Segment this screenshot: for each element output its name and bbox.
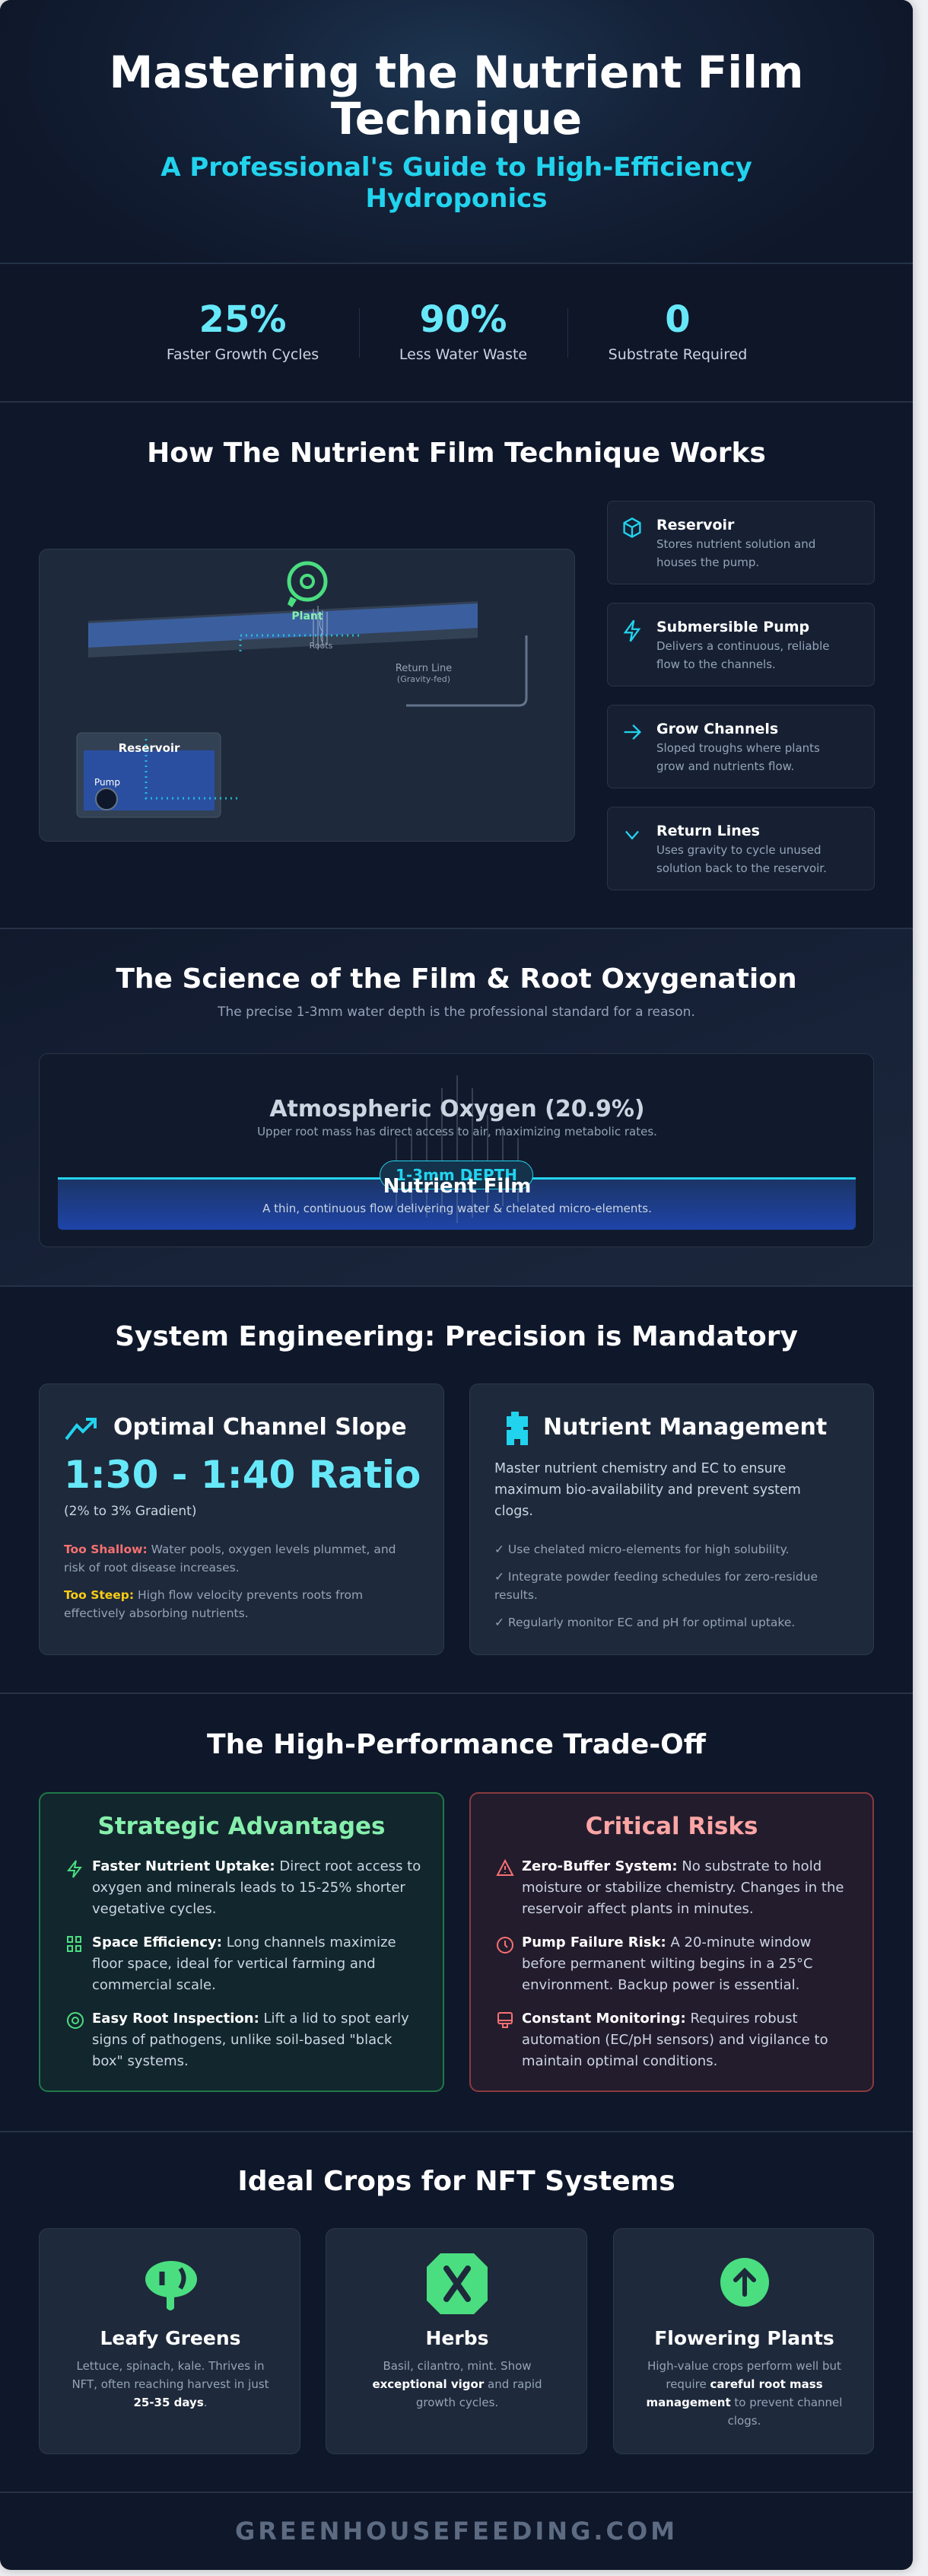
stat: 0: Substrate Required [609,346,747,363]
icon: plant [288,563,326,623]
reservoir: Pump [94,777,120,788]
section heading: trade-off: The High-Performance Trade-Off [207,1729,706,1760]
card: nutrient management [469,1384,874,1655]
icon: puzzle [507,1412,528,1445]
card: channel slope: Optimal Channel Slope [113,1414,407,1441]
panel: risks [469,1792,874,2092]
card: channel slope: (2% to 3% Gradient) [64,1504,196,1519]
crop card: leafy greens [39,2228,300,2454]
heading: The Science of the Film & Root Oxygenation [116,963,797,995]
return line: (Gravity-fed) [397,674,450,684]
risk: monitoring: Constant Monitoring: Requires robust automation (EC/pH sensors) and vigilance to maintain optimal conditions. [522,2011,828,2069]
advantage: inspection: Easy Root Inspection: Lift a lid to spot early signs of pathogens, unlike soil-based "black box" systems. [92,2011,409,2069]
step card: reservoir [607,501,875,584]
stat: 90%: Less Water Waste [399,346,527,363]
step card: pump: Delivers a continuous, reliable flow to the channels. [656,639,829,671]
subtitle [160,152,752,214]
icon: leaf [145,2261,197,2310]
film diagram [39,1053,874,1247]
nutrient film band [58,1177,856,1230]
section heading: how it works: How The Nutrient Film Technique Works [147,438,766,469]
crop card: leafy greens: Leafy Greens [100,2327,241,2349]
step card: return lines: Uses gravity to cycle unused solution back to the reservoir. [656,843,827,875]
science section [0,929,913,1285]
checklist: ✓ Integrate powder feeding schedules for zero-residue results. [494,1570,818,1602]
stat: 0 [609,298,747,363]
return line: Return Line [396,663,452,674]
crop card: flowering [613,2228,874,2454]
stat: 25%: Faster Growth Cycles [167,346,319,363]
icon: trending [65,1418,97,1440]
step card: pump: Submersible Pump [656,619,809,635]
return line [396,635,526,705]
advantage: space: Space Efficiency: Long channels maximize floor space, ideal for vertical farming and commercial scale. [92,1934,396,1993]
footer: GREENHOUSEFEEDING.COM [235,2517,678,2546]
subheading: The precise 1-3mm water depth is the professional standard for a reason. [218,1005,695,1020]
too shallow: Too Shallow: Water pools, oxygen levels plummet, and risk of root disease increases. [64,1543,396,1575]
panel: advantages: Strategic Advantages [98,1813,385,1840]
checklist [494,1543,818,1629]
stat: 25%: 25% [199,298,286,341]
title: Technique [331,93,582,145]
reservoir: Reservoir [119,741,180,755]
root lines [396,1075,519,1223]
risk: pump failure: Pump Failure Risk: A 20-minute window before permanent wilting begins in a 25°C environment. Backup power is essential. [522,1934,813,1993]
icon: plant: Plant [291,610,323,623]
crop card: flowering: Flowering Plants [654,2327,834,2349]
checklist: ✓ Regularly monitor EC and pH for optimal uptake. [494,1616,795,1629]
depth pill: 1-3mm DEPTH [396,1166,517,1184]
film diagram: A thin, continuous flow delivering water & chelated micro-elements. [262,1202,652,1215]
subtitle: Hydroponics [365,183,548,214]
stat: 90% [399,298,527,363]
icon: flowering [720,2258,769,2307]
section heading: engineering: System Engineering: Precision is Mandatory [115,1321,798,1352]
stats row [0,264,913,402]
diagram panel: Roots [310,641,333,651]
risk: zero buffer: Zero-Buffer System: No substrate to hold moisture or stabilize chemistry. Changes in the reservoir affect plants in minutes. [522,1858,844,1917]
crop card: flowering: High-value crops perform well but require careful root mass management to prevent channel clogs. [647,2359,842,2428]
step card: return lines [607,807,875,890]
description: Master nutrient chemistry and EC to ensure maximum bio-availability and prevent system clogs. [494,1461,801,1519]
step card: channels: Sloped troughs where plants grow and nutrients flow. [656,741,820,773]
step card: reservoir: Reservoir [656,517,734,533]
nutrient film label: Nutrient Film [383,1175,531,1198]
roots [313,606,327,650]
panel: risks: Critical Risks [586,1813,758,1840]
oxygen label: Atmospheric Oxygen (20.9%) [269,1096,645,1122]
step card: pump [607,603,875,686]
checklist: ✓ Use chelated micro-elements for high solubility. [494,1543,789,1556]
crop card: herbs [326,2228,587,2454]
diagram panel [39,549,575,842]
channel [88,601,478,658]
icon: herbs [427,2253,488,2314]
advantage: uptake: Faster Nutrient Uptake: Direct root access to oxygen and minerals leads to 15-25% shorter vegetative cycles. [92,1858,421,1917]
step card: channels: Grow Channels [656,721,778,737]
film diagram: Upper root mass has direct access to air, maximizing metabolic rates. [257,1125,657,1138]
too steep: Too Steep: High flow velocity prevents roots from effectively absorbing nutrients. [64,1588,363,1620]
crop card: herbs: Basil, cilantro, mint. Show exceptional vigor and rapid growth cycles. [372,2359,542,2409]
header section [0,0,913,263]
step card: reservoir: Stores nutrient solution and houses the pump. [656,537,815,569]
crop card: herbs: Herbs [426,2327,488,2349]
card: channel slope [39,1384,444,1655]
supply line dotted [146,635,359,798]
panel: advantages [39,1792,444,2092]
title [110,46,803,145]
subtitle: A Professional's Guide to High-Efficiency [160,152,752,183]
step card: return lines: Return Lines [656,823,760,839]
step card: channels [607,705,875,788]
reservoir [77,733,221,817]
stat: 0: 0 [665,298,691,341]
depth pill [380,1161,533,1189]
crop card: leafy greens: Lettuce, spinach, kale. Thrives in NFT, often reaching harvest in just 25-35 days. [72,2359,269,2409]
section heading: crops: Ideal Crops for NFT Systems [237,2166,675,2197]
title: Mastering the Nutrient Film [110,46,803,98]
stat: 90%: 90% [420,298,507,341]
card: nutrient management: Nutrient Management [543,1414,827,1441]
stat: 25% [167,298,319,363]
ratio: 1:30 - 1:40 Ratio [64,1453,421,1497]
